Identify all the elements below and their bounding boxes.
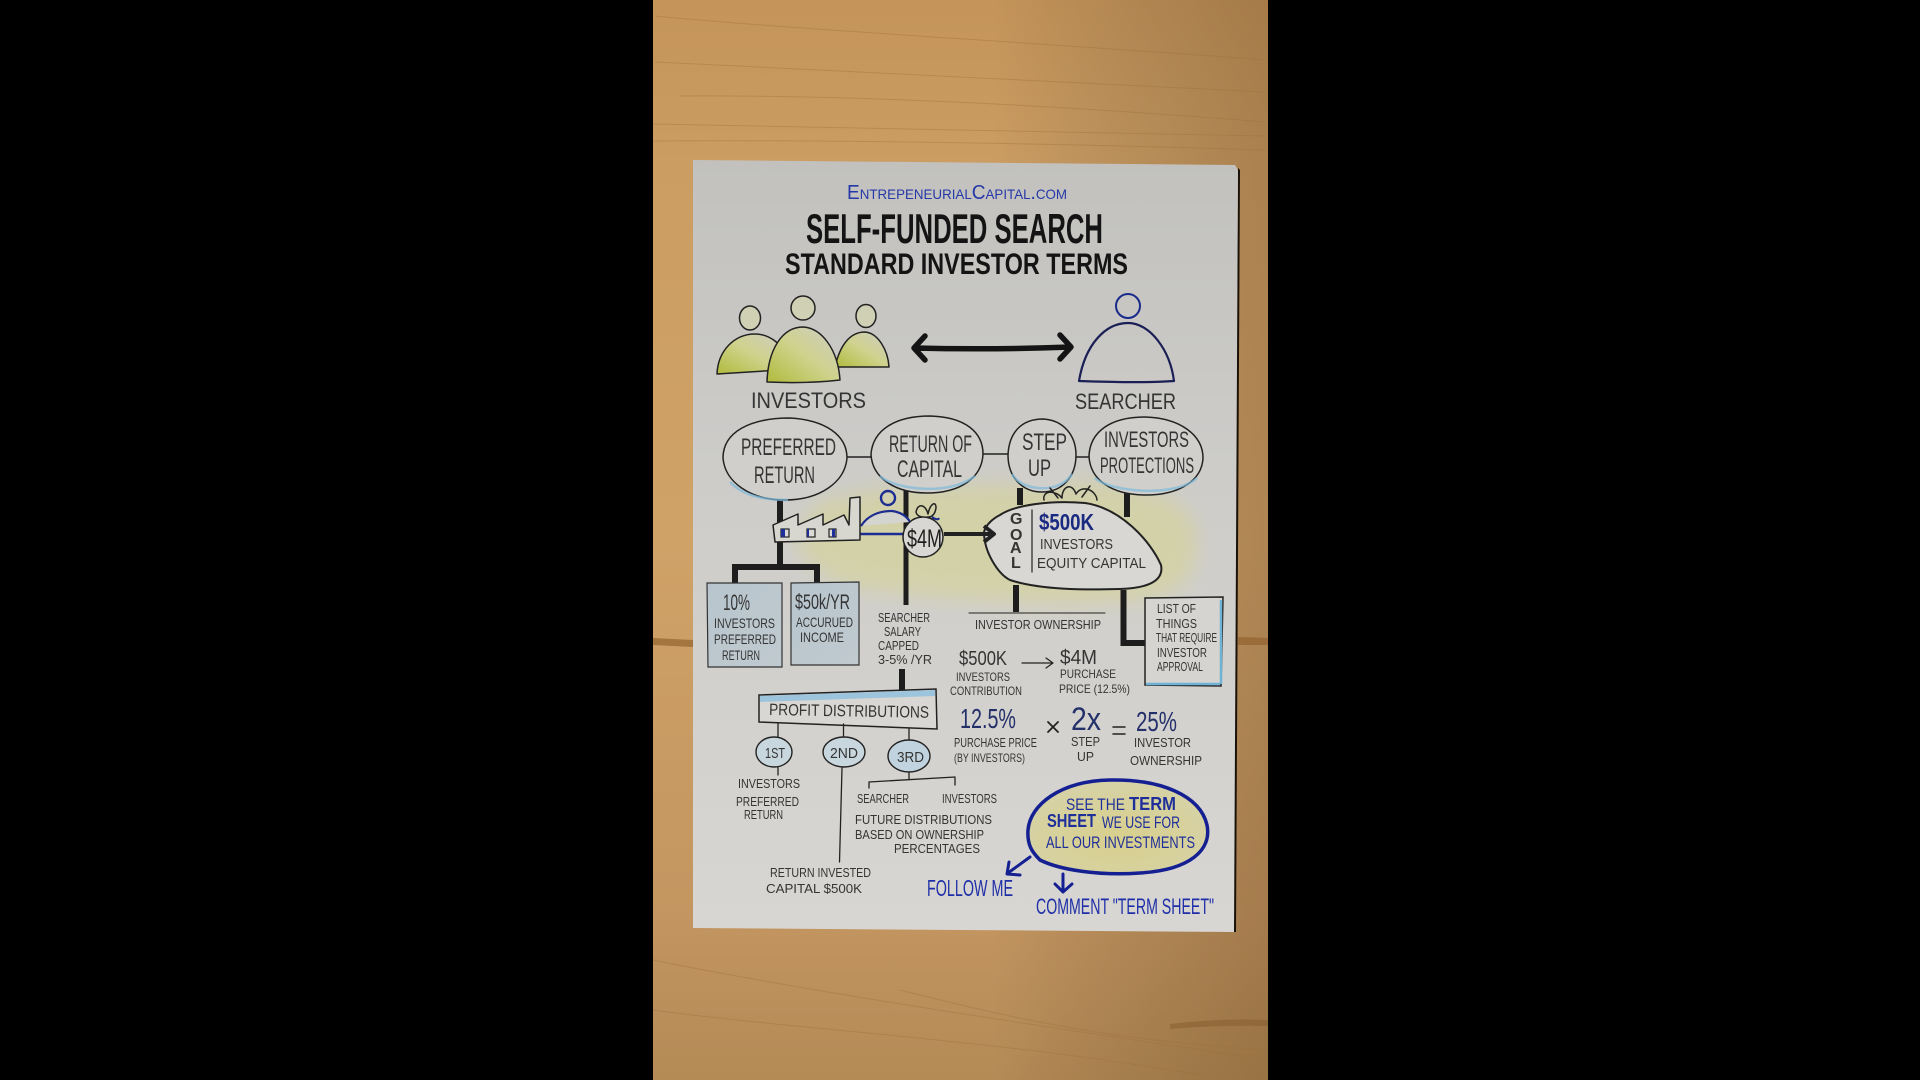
ownership equation: PURCHASE PRICE bbox=[954, 736, 1037, 750]
callout: see the term sheet: TERM bbox=[1129, 794, 1176, 814]
comment term sheet call to action: COMMENT "TERM SHEET" bbox=[1036, 894, 1214, 919]
1st step note: RETURN bbox=[744, 807, 783, 822]
bubble: return of capital: CAPITAL bbox=[897, 456, 962, 483]
step 2nd circle bbox=[823, 737, 865, 767]
3rd step split and note: INVESTORS bbox=[942, 792, 997, 806]
profit distributions banner: PROFIT DISTRIBUTIONS bbox=[769, 701, 929, 722]
wooden table surface bbox=[653, 0, 1268, 1080]
searcher salary note: 3-5% /YR bbox=[878, 653, 932, 667]
connector lines between term bubbles bbox=[847, 454, 1089, 457]
2nd step note: CAPITAL $500K bbox=[766, 881, 862, 896]
icon: small searcher bbox=[860, 491, 910, 534]
step 3rd circle: 3RD bbox=[897, 749, 924, 766]
box: list of things that require investor approval: APPROVAL bbox=[1157, 660, 1203, 674]
3rd step split and note: PERCENTAGES bbox=[894, 842, 980, 856]
box: $50k per year accrued income: INCOME bbox=[800, 629, 844, 645]
box: list of things that require investor approval: THAT REQUIRE bbox=[1156, 631, 1217, 645]
goal lettering: A bbox=[1010, 540, 1022, 557]
callout: see the term sheet bbox=[1028, 780, 1208, 874]
box: 10% preferred return: INVESTORS bbox=[714, 615, 775, 631]
searcher salary note: CAPPED bbox=[878, 639, 919, 653]
box: list of things that require investor approval: LIST OF bbox=[1157, 602, 1196, 616]
distribution tree lines bbox=[778, 723, 955, 862]
subtitle: STANDARD INVESTOR TERMS bbox=[785, 248, 1128, 281]
searcher salary note bbox=[878, 611, 932, 667]
1st step note: PREFERRED bbox=[736, 794, 799, 809]
bubble: investors protections: PROTECTIONS bbox=[1100, 453, 1194, 478]
bubble: investors protections: INVESTORS bbox=[1104, 427, 1189, 452]
contribution calculation: $4M bbox=[1060, 647, 1097, 669]
1st step note: INVESTORS bbox=[738, 776, 800, 791]
box: list of things that require investor approval: INVESTOR bbox=[1157, 646, 1207, 660]
arrow: contribution to price bbox=[1022, 658, 1053, 668]
ownership equation: STEP bbox=[1071, 735, 1100, 749]
investor ownership heading bbox=[969, 613, 1105, 633]
step 1st circle bbox=[756, 737, 792, 767]
goal lettering: G bbox=[1010, 511, 1022, 528]
3rd step split and note: FUTURE DISTRIBUTIONS bbox=[855, 813, 992, 827]
investors label: INVESTORS bbox=[751, 388, 866, 413]
contribution calculation: INVESTORS bbox=[956, 670, 1010, 684]
3rd step split and note: SEARCHER bbox=[857, 792, 909, 806]
paper sheet bbox=[693, 160, 1240, 932]
contribution calculation: PURCHASE bbox=[1060, 667, 1116, 681]
follow me call to action: FOLLOW ME bbox=[927, 875, 1013, 901]
arrow: $4M bag to goal bag bbox=[944, 526, 994, 542]
investor ownership heading: INVESTOR OWNERSHIP bbox=[975, 617, 1101, 632]
box: 10% preferred return: PREFERRED bbox=[714, 631, 776, 647]
icon: goal money bag: INVESTORS bbox=[1040, 536, 1113, 553]
2nd step note: RETURN INVESTED bbox=[770, 865, 871, 880]
step 3rd circle bbox=[888, 740, 930, 772]
ownership equation: 2x bbox=[1071, 701, 1101, 737]
2nd step note bbox=[766, 865, 871, 896]
bubble: return of capital bbox=[871, 416, 983, 493]
searcher salary note: SEARCHER bbox=[878, 611, 930, 625]
profit distributions banner bbox=[759, 689, 937, 729]
ownership equation: 25% bbox=[1136, 706, 1177, 737]
1st step note bbox=[736, 776, 800, 822]
icon: $4M money bag: $4M bbox=[907, 525, 942, 553]
contribution calculation bbox=[950, 647, 1130, 698]
bubble: preferred return: PREFERRED bbox=[741, 434, 836, 461]
bubble: step up: UP bbox=[1028, 455, 1051, 482]
icon: goal money bag: EQUITY CAPITAL bbox=[1037, 555, 1146, 572]
ownership equation: 12.5% bbox=[960, 703, 1016, 734]
3rd step split and note: BASED ON OWNERSHIP bbox=[855, 828, 984, 842]
ownership equation: INVESTOR bbox=[1134, 736, 1191, 750]
callout: see the term sheet: ALL OUR INVESTMENTS bbox=[1046, 833, 1195, 852]
contribution calculation: PRICE (12.5%) bbox=[1059, 682, 1130, 696]
bubble: preferred return bbox=[723, 418, 847, 500]
searcher label: SEARCHER bbox=[1075, 389, 1176, 414]
arrow: callout to comment bbox=[1055, 874, 1072, 892]
box: list of things that require investor approval bbox=[1145, 597, 1223, 686]
bubble: preferred return: RETURN bbox=[754, 462, 815, 489]
callout: see the term sheet: SHEET bbox=[1047, 811, 1096, 831]
contribution calculation: $500K bbox=[959, 648, 1008, 670]
icon: factory bbox=[773, 497, 860, 542]
contribution calculation: CONTRIBUTION bbox=[950, 684, 1022, 698]
callout: see the term sheet: WE USE FOR bbox=[1102, 813, 1180, 832]
bubble: investors protections bbox=[1089, 417, 1203, 495]
box: list of things that require investor approval: THINGS bbox=[1156, 617, 1197, 631]
goal lettering bbox=[1010, 511, 1022, 572]
box: $50k per year accrued income: ACCURUED bbox=[796, 614, 853, 630]
ownership equation: (BY INVESTORS) bbox=[954, 751, 1025, 765]
ownership equation: UP bbox=[1077, 750, 1094, 764]
box: 10% preferred return: RETURN bbox=[722, 647, 760, 663]
icon: goal money bag bbox=[984, 486, 1161, 589]
bubble: return of capital: RETURN OF bbox=[889, 431, 972, 458]
icon: searcher bbox=[1079, 294, 1174, 382]
bubble: step up: STEP bbox=[1022, 429, 1067, 456]
icon: $4M money bag bbox=[903, 504, 943, 557]
yellow highlight behind the flow bbox=[798, 482, 1196, 603]
step 1st circle: 1ST bbox=[765, 745, 785, 762]
thick connector lines down from term bubbles bbox=[735, 488, 1146, 692]
step 2nd circle: 2ND bbox=[830, 745, 858, 762]
ownership equation: OWNERSHIP bbox=[1130, 754, 1202, 768]
3rd step split and note bbox=[855, 792, 997, 856]
icon: investors group bbox=[717, 296, 889, 383]
searcher salary note: SALARY bbox=[884, 625, 921, 639]
callout: see the term sheet: SEE THE bbox=[1066, 795, 1125, 814]
icon: goal money bag: $500K bbox=[1039, 509, 1094, 535]
ownership equation bbox=[954, 701, 1202, 768]
bubble: step up bbox=[1008, 419, 1076, 492]
goal lettering: O bbox=[1010, 527, 1022, 544]
box: 10% preferred return: 10% bbox=[723, 590, 750, 615]
website heading: EntrepeneurialCapital.com bbox=[847, 182, 1067, 204]
double arrow between investors and searcher bbox=[914, 335, 1071, 360]
title: SELF-FUNDED SEARCH bbox=[806, 205, 1103, 252]
box: 10% preferred return bbox=[707, 583, 782, 667]
arrow: callout to follow me bbox=[1007, 857, 1030, 875]
box: $50k per year accrued income: $50k/YR bbox=[795, 591, 850, 614]
box: $50k per year accrued income bbox=[791, 582, 859, 665]
goal lettering: L bbox=[1011, 555, 1021, 572]
